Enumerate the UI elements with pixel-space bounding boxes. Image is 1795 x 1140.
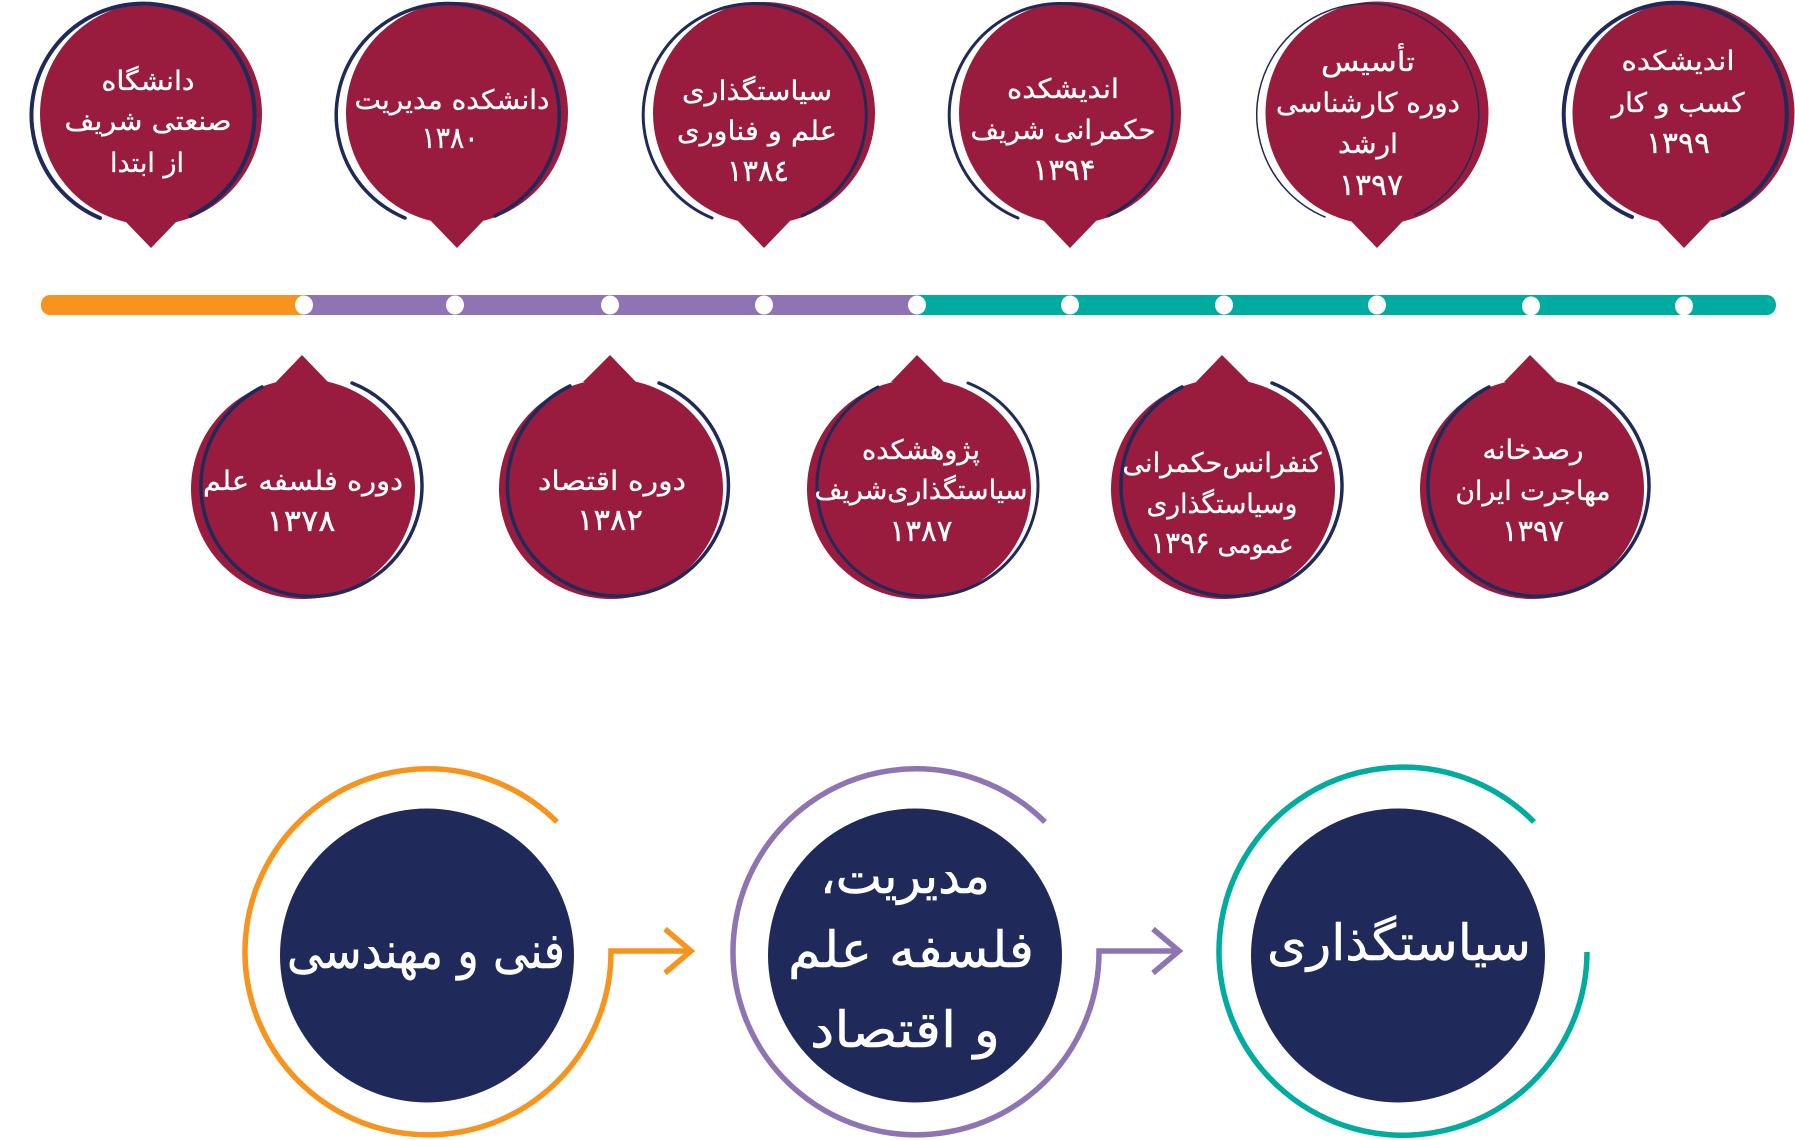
circle: policymaking [1219,767,1587,1135]
top balloon: School of Management: دانشکده مدیریت [354,85,550,116]
top balloon: Sharif University [31,3,262,248]
circle: management, philosophy of science and economics: و اقتصاد [810,1001,1000,1060]
top balloon: Founding of master's program [1257,2,1488,248]
bottom balloon: Migration Observatory: ۱۳۹۷ [1502,514,1564,549]
circle: management, philosophy of science and economics: مدیریت، [820,847,990,905]
top balloon: Founding of master's program: ۱۳۹۷ [1339,168,1403,203]
top balloon: Sharif University: صنعتی شریف [64,106,232,137]
top balloon: Sharif School of Governance: حکمرانی شریف [970,115,1156,146]
circle: engineering [245,769,691,1135]
bottom balloon: Governance and Public Policy Conference [1111,355,1342,599]
top balloon: Sharif University: از ابتدا [110,148,184,179]
bottom balloon: Sharif Policy Research Institute: سیاستگذاری‌شریف [814,474,1028,506]
top balloon: Science and Technology Policy: علم و فناوری [677,116,837,147]
bottom balloon: Governance and Public Policy Conference: وسیاستگذاری [1146,488,1298,520]
top balloon: Sharif School of Governance: ۱۳۹۴ [1032,153,1096,188]
timeline bar [41,295,1776,316]
top balloon: School of Management: ۱۳۸۰ [422,121,478,156]
top balloon: Science and Technology Policy: ۱۳۸٤ [727,154,789,189]
bottom balloon: Sharif Policy Research Institute [807,355,1038,599]
bottom balloon: Governance and Public Policy Conference: عمومی ۱۳۹۶ [1150,526,1294,561]
bottom balloon: Migration Observatory: رصدخانه [1482,435,1584,466]
bottom balloon: Migration Observatory [1420,355,1649,599]
bottom balloon: Philosophy of Science program [191,355,422,599]
bottom balloon: Sharif Policy Research Institute: پژوهشکده [862,435,980,466]
top balloon: Sharif School of Governance [949,2,1181,248]
circle: management, philosophy of science and economics: فلسفه علم [788,921,1034,979]
top balloon: School of Business: ۱۳۹۹ [1646,126,1710,161]
top balloon: Founding of master's program: تأسیس [1321,42,1415,78]
top balloon: School of Business: کسب و کار [1609,88,1745,119]
top balloon: Founding of master's program: ارشد [1338,129,1398,160]
top balloon: Founding of master's program: دوره کارشناسی [1276,88,1460,119]
circle: management, philosophy of science and economics [733,769,1179,1135]
circle: engineering: فنی و مهندسی [287,922,565,981]
bottom balloon: Migration Observatory: مهاجرت ایران [1456,476,1610,507]
top balloon: Science and Technology Policy: سیاستگذاری [682,75,832,107]
bottom balloon: Philosophy of Science program: دوره فلسفه علم [203,466,403,497]
top balloon: Science and Technology Policy [643,2,875,248]
bottom balloon: Governance and Public Policy Conference: کنفرانس‌حکمرانی [1122,448,1322,479]
bottom balloon: Economics program: ۱۳۸۲ [577,503,643,538]
top balloon: School of Management [336,2,568,248]
top balloon: Sharif University: دانشگاه [102,65,194,97]
bottom balloon: Sharif Policy Research Institute: ۱۳۸۷ [890,514,952,549]
top balloon: School of Business [1564,2,1794,248]
bottom balloon: Economics program [499,355,728,599]
top balloon: Sharif School of Governance: اندیشکده [1007,74,1119,105]
bottom balloon: Economics program: دوره اقتصاد [538,466,686,497]
top balloon: School of Business: اندیشکده [1622,46,1734,77]
bottom balloon: Philosophy of Science program: ۱۳۷۸ [266,504,336,539]
circle: policymaking: سیاستگذاری [1267,914,1531,972]
